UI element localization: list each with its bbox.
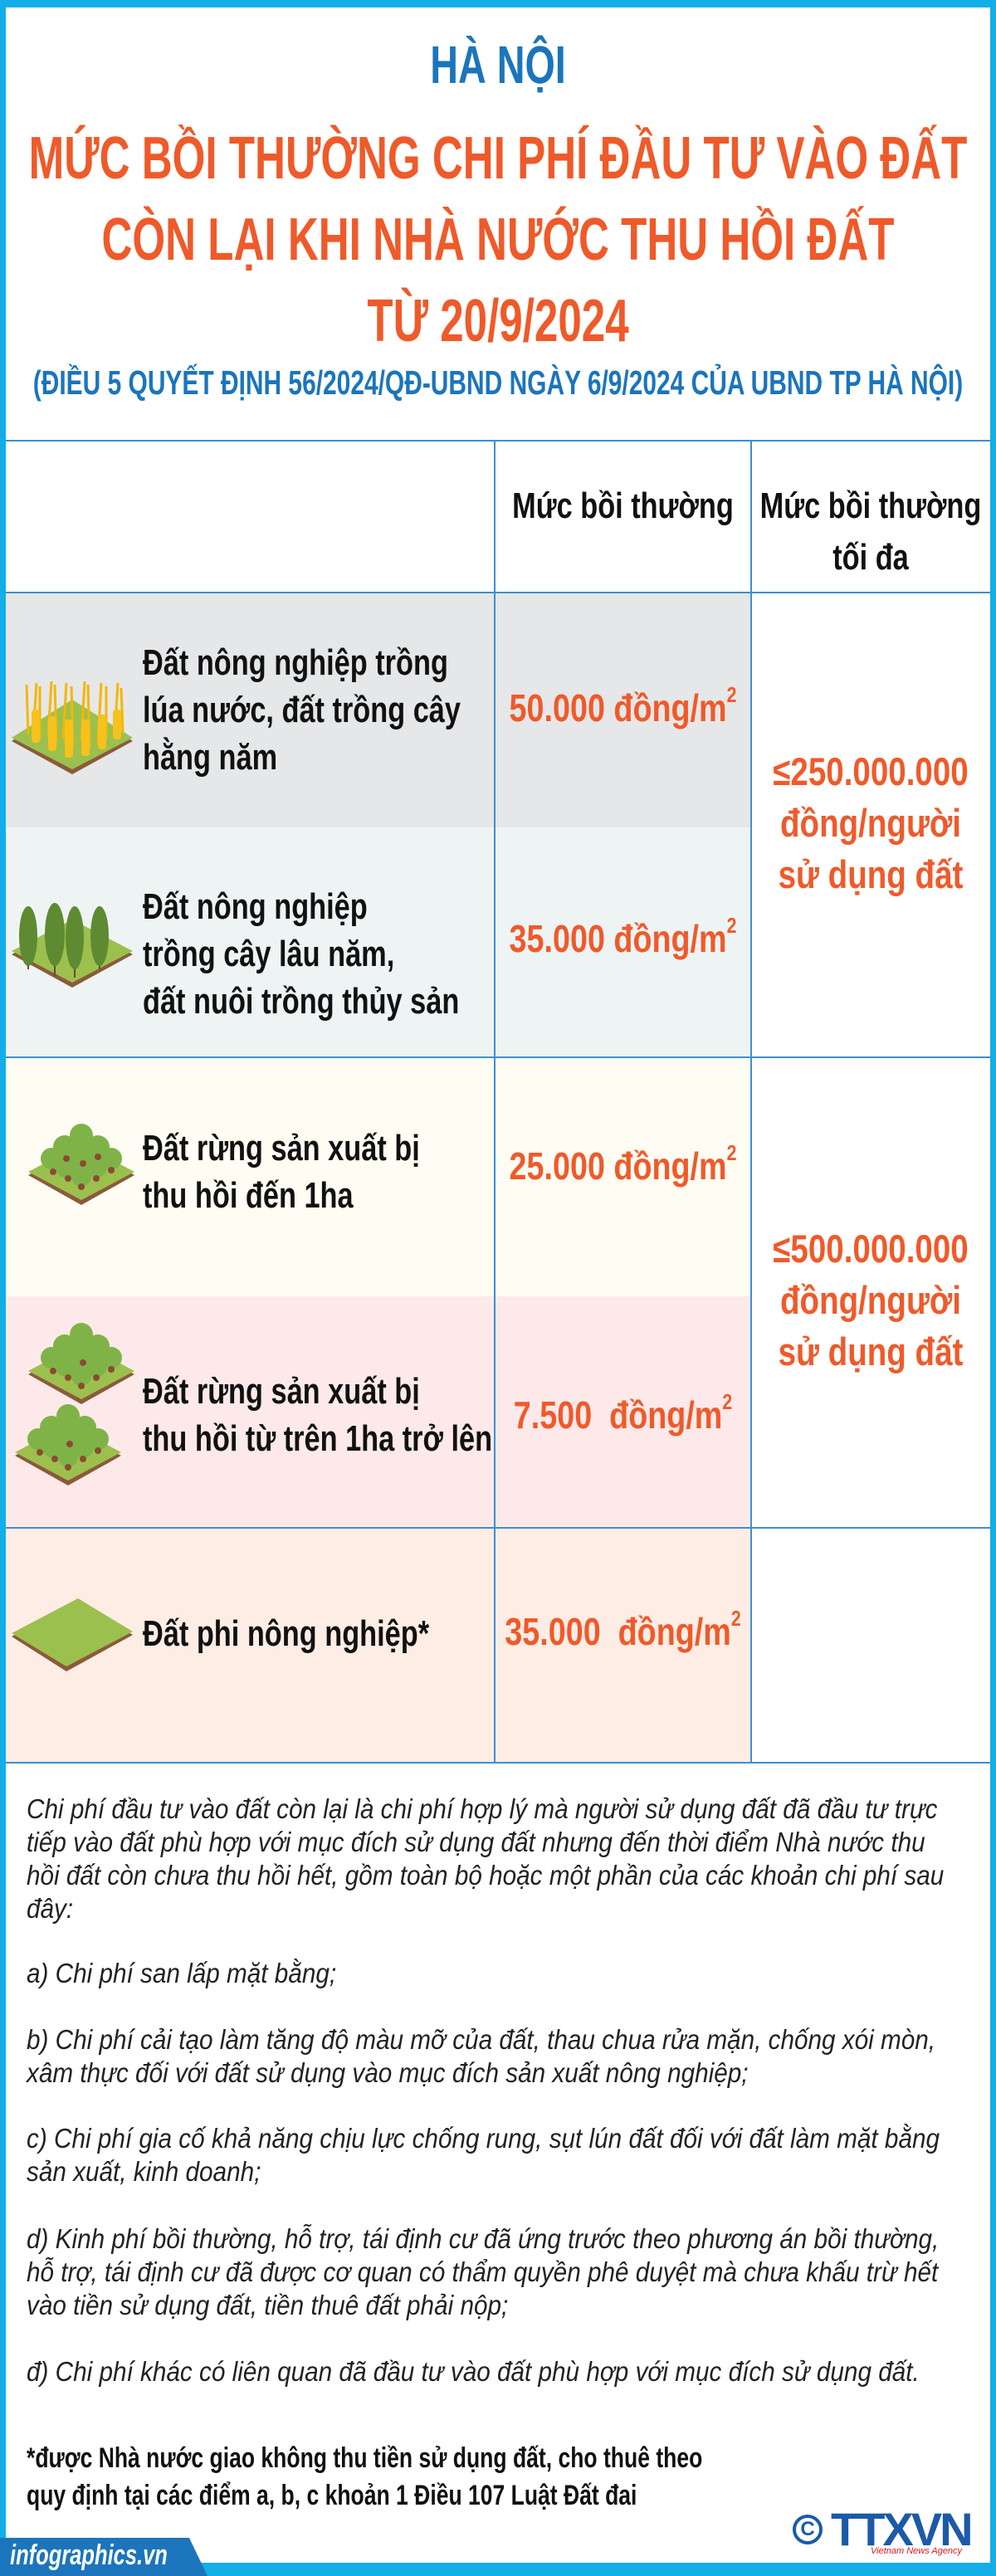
item d: hỗ trợ, tái định cư đã được cơ quan có thẩm quyền phê duyệt mà chưa khấu trừ hết xyxy=(27,2256,938,2287)
label row 2 xyxy=(143,886,459,1022)
item c xyxy=(27,2123,940,2187)
definition paragraph: đây: xyxy=(27,1893,73,1924)
header: max compensation: Mức bồi thường xyxy=(760,485,981,526)
value row 3: 25.000 đồng/m2 xyxy=(510,1140,736,1188)
logo: TTXVN: Vietnam News Agency xyxy=(871,2546,962,2556)
definition paragraph: hồi đất còn chưa thu hồi hết, gồm toàn bộ hoặc một phần của các khoản chi phí sau xyxy=(27,1860,944,1891)
label row 2: trồng cây lâu năm, xyxy=(143,934,394,974)
logo: TTXVN: C xyxy=(800,2518,815,2540)
icon: flat land xyxy=(12,1598,133,1671)
value row 2: 35.000 đồng/m2 xyxy=(510,913,736,960)
item b xyxy=(25,2024,935,2088)
footer tab: infographics.vn: infographics.vn xyxy=(10,2539,168,2571)
label row 4: Đất rừng sản xuất bị xyxy=(143,1371,420,1412)
value row 5: 35.000 đồng/m2 xyxy=(505,1606,741,1653)
table xyxy=(6,440,990,1764)
item b: b) Chi phí cải tạo làm tăng độ màu mỡ của đất, thau chua rửa mặn, chống xói mòn, xyxy=(27,2024,935,2055)
definition paragraph: Chi phí đầu tư vào đất còn lại là chi phí hợp lý mà người sử dụng đất đã đầu tư trực xyxy=(27,1793,938,1824)
max value group 2: sử dụng đất xyxy=(779,1329,963,1373)
header: compensation level: Mức bồi thường xyxy=(512,485,734,526)
max value group 2: ≤500.000.000 xyxy=(773,1227,969,1271)
label row 2: Đất nông nghiệp xyxy=(143,886,368,927)
item d: vào tiền sử dụng đất, tiền thuê đất phải nộp; xyxy=(27,2290,508,2320)
label row 1 xyxy=(143,642,461,778)
label row 3: Đất rừng sản xuất bị xyxy=(143,1128,420,1168)
max value group 1 xyxy=(773,749,969,896)
definition paragraph: tiếp vào đất phù hợp với mục đích sử dụng đất nhưng đến thời điểm Nhà nước thu xyxy=(27,1827,925,1857)
title main xyxy=(29,124,967,354)
icon: trees xyxy=(12,903,133,988)
footnote: quy định tại các điểm a, b, c khoản 1 Điều 107 Luật Đất đai xyxy=(27,2480,637,2511)
label row 3 xyxy=(143,1128,420,1216)
label row 5: Đất phi nông nghiệp* xyxy=(143,1613,429,1654)
row backgrounds xyxy=(6,593,751,827)
footnote xyxy=(27,2442,702,2511)
logo: TTXVN: TTXVN xyxy=(831,2503,971,2555)
title main: CÒN LẠI KHI NHÀ NƯỚC THU HỒI ĐẤT xyxy=(101,207,894,273)
footnote: *được Nhà nước giao không thu tiền sử dụng đất, cho thuê theo xyxy=(27,2442,702,2474)
icon: forest 2 (double) xyxy=(15,1323,134,1486)
max value group 2 xyxy=(773,1227,969,1373)
item b: xâm thực đối với đất sử dụng vào mục đích sản xuất nông nghiệp; xyxy=(27,2057,749,2088)
icon: forest 1 xyxy=(28,1124,134,1205)
max value group 1: sử dụng đất xyxy=(779,852,963,896)
title main: TỪ 20/9/2024 xyxy=(367,288,629,354)
max value group 1: đồng/người xyxy=(780,801,961,845)
icon: rice field xyxy=(12,681,133,774)
grid lines xyxy=(6,440,990,442)
item c: c) Chi phí gia cố khả năng chịu lực chống rung, sụt lún đất đối với đất làm mặt bằng xyxy=(27,2123,940,2154)
label row 1: hằng năm xyxy=(143,737,277,778)
item d: d) Kinh phí bồi thường, hỗ trợ, tái định cư đã ứng trước theo phương án bồi thường, xyxy=(27,2223,939,2254)
title: Hà Nội: HÀ NỘI xyxy=(430,35,566,95)
label row 1: Đất nông nghiệp trồng xyxy=(143,642,448,683)
header: max compensation xyxy=(760,485,981,578)
bottom bar xyxy=(0,2563,996,2576)
item d xyxy=(27,2223,940,2320)
header: max compensation: tối đa xyxy=(832,537,909,578)
label row 1: lúa nước, đất trồng cây xyxy=(143,690,461,730)
item c: sản xuất, kinh doanh; xyxy=(27,2156,261,2187)
label row 3: thu hồi đến 1ha xyxy=(143,1175,354,1216)
title main: MỨC BỒI THƯỜNG CHI PHÍ ĐẦU TƯ VÀO ĐẤT xyxy=(29,125,967,192)
footer tab: infographics.vn xyxy=(0,2538,208,2576)
item a: a) Chi phí san lấp mặt bằng; xyxy=(27,1958,336,1988)
item đ: đ) Chi phí khác có liên quan đã đầu tư vào đất phù hợp với mục đích sử dụng đất. xyxy=(27,2356,920,2387)
value row 4: 7.500 đồng/m2 xyxy=(514,1389,732,1437)
max value group 2: đồng/người xyxy=(780,1278,961,1322)
label row 4 xyxy=(143,1371,492,1459)
definition paragraph xyxy=(27,1793,944,1924)
value row 1: 50.000 đồng/m2 xyxy=(510,682,736,729)
label row 4: thu hồi từ trên 1ha trở lên xyxy=(143,1418,492,1459)
max value group 1: ≤250.000.000 xyxy=(773,749,969,793)
subtitle: (ĐIỀU 5 QUYẾT ĐỊNH 56/2024/QĐ-UBND NGÀY 6/9/2024 CỦA UBND TP HÀ NỘI) xyxy=(33,363,963,402)
label row 2: đất nuôi trồng thủy sản xyxy=(143,981,459,1022)
